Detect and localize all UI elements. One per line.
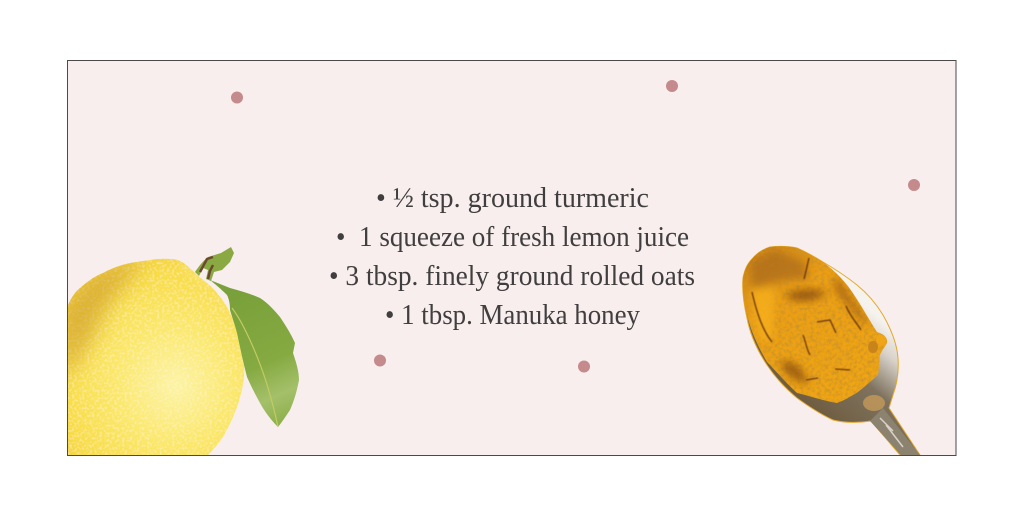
ingredient: lemon juice: • 1 squeeze of fresh lemon juice [336, 222, 689, 253]
ingredient: oats: • 3 tbsp. finely ground rolled oats [329, 261, 695, 292]
decorative dots [231, 80, 920, 372]
ingredient: honey: • 1 tbsp. Manuka honey [385, 300, 640, 331]
panel: pink background with border [68, 60, 956, 456]
turmeric powder [742, 246, 888, 403]
lemon stem [195, 247, 234, 281]
infographic canvas [67, 60, 956, 456]
leaf [210, 280, 299, 427]
spoon handle [870, 408, 920, 455]
lemon body [68, 258, 244, 455]
illustration: spoon of turmeric [738, 242, 920, 455]
ingredient: turmeric: • ½ tsp. ground turmeric [376, 183, 649, 214]
ingredient list [329, 183, 695, 331]
illustration: lemon with leaf [60, 247, 299, 460]
spoon metal [743, 246, 920, 455]
